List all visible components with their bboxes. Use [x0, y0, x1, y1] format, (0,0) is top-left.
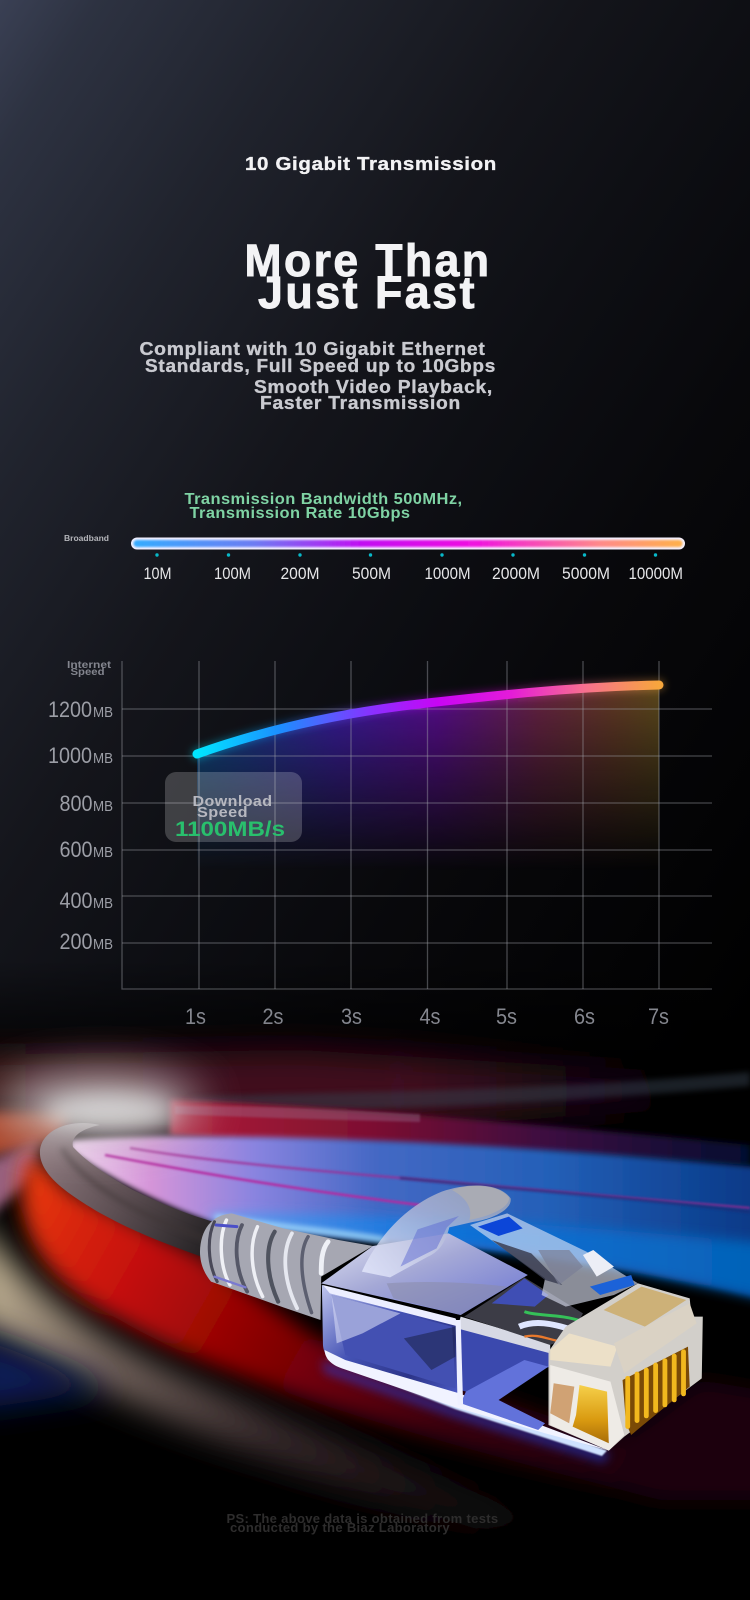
housing bottom lip: [325, 1350, 607, 1450]
speed curve: [197, 685, 659, 754]
housing side face: [322, 1285, 461, 1403]
x axis labels: 4s: [420, 1004, 440, 1029]
description text: Smooth Video Playback,: [254, 377, 493, 397]
scale labels: [144, 564, 683, 583]
scale labels: 10M: [144, 564, 172, 583]
white glow: [0, 1075, 200, 1135]
footnote: [226, 1511, 498, 1535]
y axis labels: MB: [93, 844, 113, 861]
axis title: [67, 660, 112, 678]
scale dots: [155, 553, 657, 557]
network cable: [40, 1123, 214, 1258]
bandwidth caption: Transmission Bandwidth 500MHz,: [184, 491, 462, 508]
y axis labels: MB: [93, 750, 113, 767]
y axis labels: 1000: [48, 743, 92, 768]
axis title: Internet: [67, 660, 112, 671]
gradient bar: [131, 538, 685, 550]
description text: Compliant with 10 Gigabit Ethernet: [140, 339, 486, 359]
front window: [456, 1317, 550, 1430]
x axis labels: 5s: [496, 1004, 517, 1029]
dark red upper glow: [0, 1050, 660, 1130]
navy left corner: [0, 1335, 110, 1410]
tan glow band: [0, 1210, 560, 1530]
scale labels: 2000M: [492, 564, 540, 583]
y axis labels: 200: [60, 929, 92, 954]
scale labels: 100M: [214, 564, 251, 583]
broadband scale: [64, 534, 685, 583]
scale labels: 500M: [352, 564, 391, 583]
y axis labels: [48, 697, 113, 954]
x axis labels: 3s: [341, 1004, 362, 1029]
scale labels: 5000M: [562, 564, 610, 583]
hero: speed light streaks: [0, 1050, 750, 1530]
description text: [140, 339, 496, 413]
broadband label: Broadband: [64, 534, 109, 543]
latch: [470, 1213, 638, 1307]
download speed callout: [165, 772, 302, 842]
download speed callout: 1100MB/s: [175, 818, 285, 841]
footnote: conducted by the Biaz Laboratory: [230, 1520, 450, 1535]
description text: Standards, Full Speed up to 10Gbps: [145, 356, 496, 376]
y axis labels: 800: [60, 791, 92, 816]
gold contacts: [573, 1347, 690, 1443]
y axis labels: MB: [93, 798, 113, 815]
upper streaks: [170, 1072, 750, 1165]
x axis labels: 7s: [648, 1004, 669, 1029]
blue under-glow: [321, 1358, 610, 1463]
footnote: PS: The above data is obtained from tests: [226, 1511, 498, 1526]
y axis labels: 400: [60, 888, 92, 913]
wire opening: [464, 1277, 583, 1345]
x axis labels: 6s: [574, 1004, 595, 1029]
RJ45 connector: [200, 1186, 703, 1463]
clip handle: [362, 1186, 511, 1277]
scale labels: 10000M: [628, 564, 683, 583]
bandwidth caption: Transmission Rate 10Gbps: [190, 505, 410, 522]
orange and pink left rays: [0, 1112, 70, 1225]
title: More Than Just Fast: [244, 235, 492, 318]
download speed callout: Speed: [197, 804, 248, 821]
y axis labels: MB: [93, 936, 113, 953]
x axis labels: 1s: [185, 1004, 206, 1029]
title: More Than Just Fast: Just Fast: [258, 267, 477, 318]
housing top face: [321, 1233, 528, 1327]
area under curve: [197, 685, 659, 870]
y axis labels: MB: [93, 704, 113, 721]
axis title: Speed: [70, 667, 104, 678]
description text: Faster Transmission: [260, 393, 461, 413]
title: More Than Just Fast: More Than: [244, 235, 492, 286]
x axis labels: [185, 1004, 669, 1029]
y axis labels: MB: [93, 895, 113, 912]
scale labels: 200M: [280, 564, 320, 583]
contact block: [549, 1283, 703, 1451]
heading: 10 Gigabit Transmission: 10 Gigabit Transmission: [245, 153, 497, 174]
red band: [21, 1150, 750, 1500]
y axis labels: 600: [60, 837, 92, 862]
blue and pink band: [70, 1136, 750, 1305]
x axis labels: 2s: [262, 1004, 284, 1029]
bandwidth caption: [184, 491, 462, 522]
download speed callout: Download: [192, 793, 272, 810]
y axis labels: 1200: [48, 697, 92, 722]
scale labels: 1000M: [424, 564, 470, 583]
strain relief boot: [200, 1213, 373, 1320]
line chart: internet speed: [48, 660, 712, 1029]
